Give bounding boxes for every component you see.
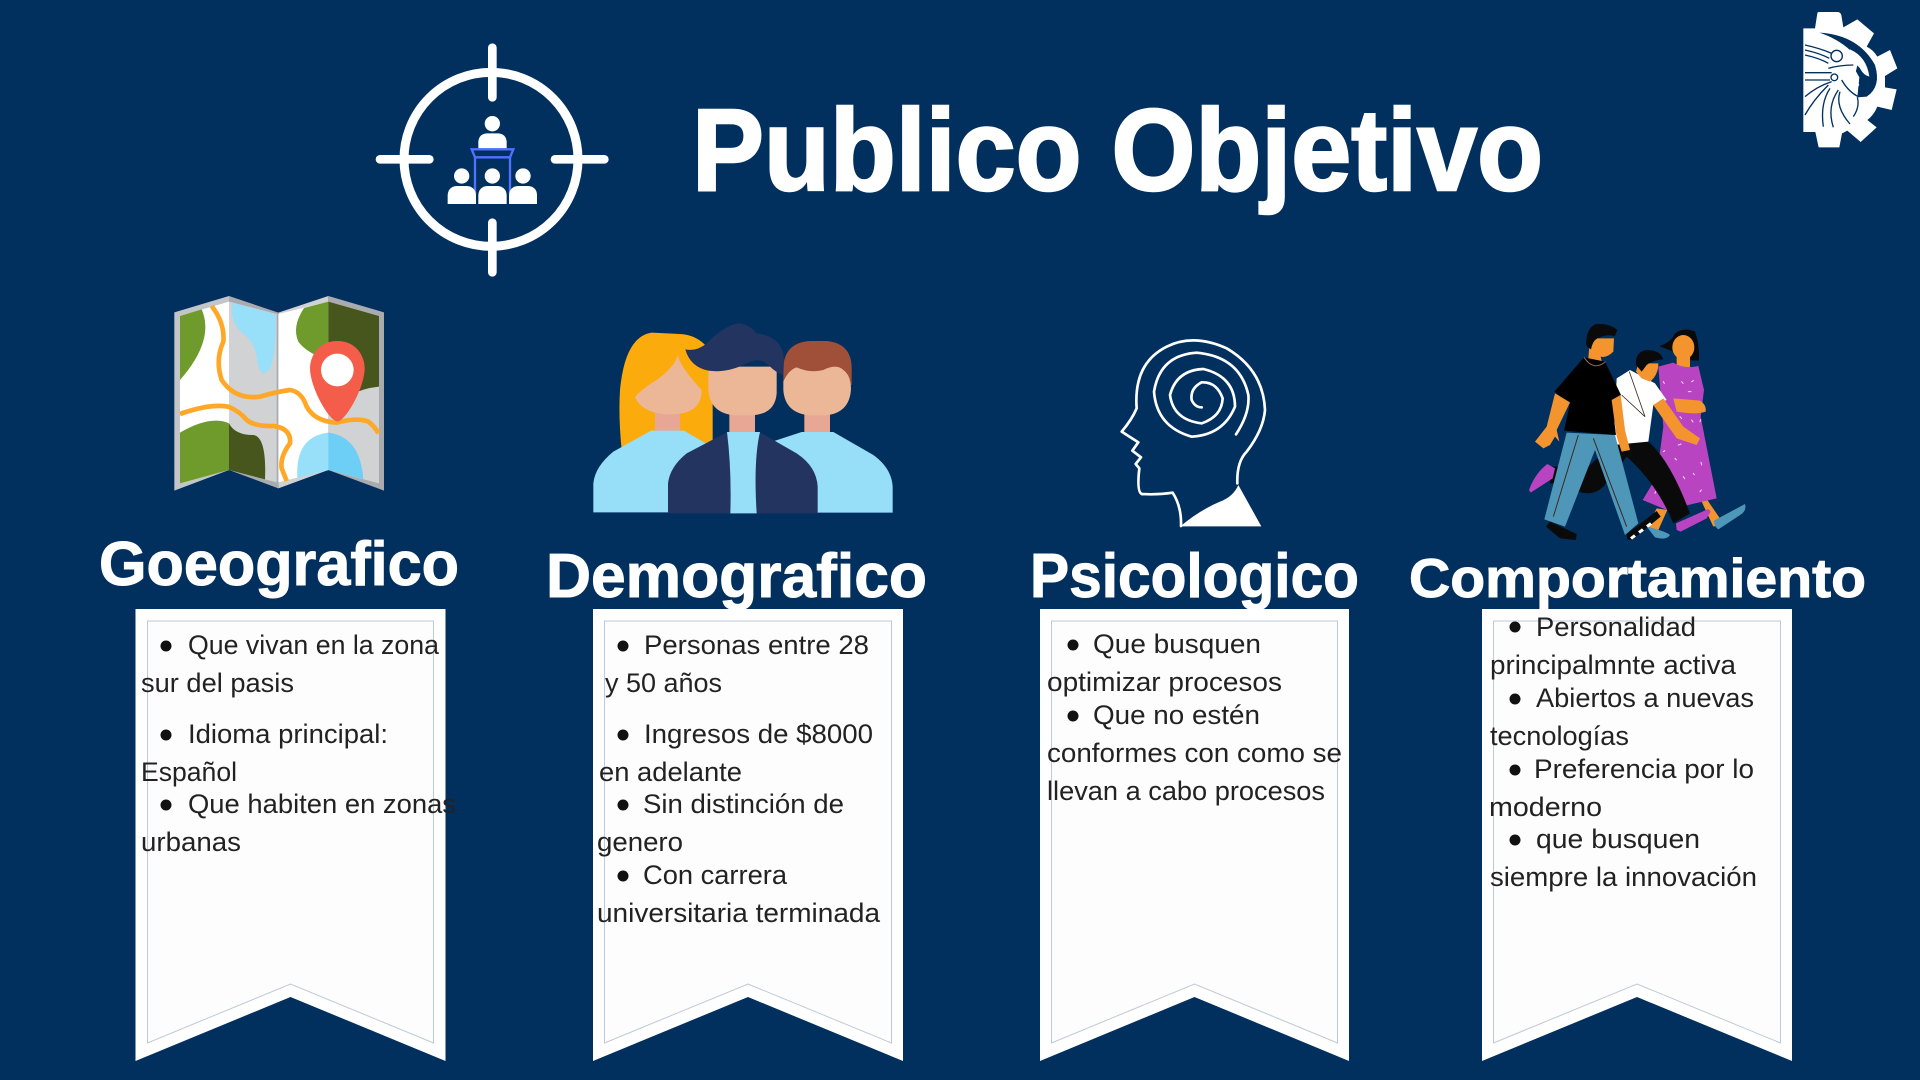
panel: comportamiento: principalmnte activa: [1490, 650, 1737, 680]
panel: comportamiento: que busquen: [1536, 824, 1700, 854]
panel: demografico: Sin distinción de: [643, 789, 844, 819]
panel: comportamiento: Abiertos a nuevas: [1536, 683, 1754, 713]
panel: demografico: Ingresos de $8000: [644, 719, 873, 749]
panel: demografico: y 50 años: [605, 668, 722, 698]
panel: demografico: universitaria terminada: [597, 898, 881, 928]
panel: comportamiento: Personalidad: [1536, 612, 1696, 642]
panel: psicologico: conformes con como se: [1047, 738, 1342, 768]
panel: psicologico: Que no estén: [1093, 700, 1260, 730]
title: Publico Objetivo: [692, 85, 1543, 215]
panel: geografico: [136, 609, 456, 1061]
panel: demografico: genero: [597, 827, 683, 857]
heading: Geografico: Goeografico: [99, 530, 459, 599]
panel: geografico: sur del pasis: [141, 668, 294, 698]
panel: comportamiento: Preferencia por lo: [1534, 754, 1754, 784]
panel: psicologico: llevan a cabo procesos: [1047, 776, 1325, 806]
panel: demografico: Personas entre 28: [644, 630, 869, 660]
panel: comportamiento: [1482, 609, 1792, 1061]
panel: geografico: Que habiten en zonas: [188, 789, 456, 819]
panel: geografico: Español: [141, 757, 237, 787]
panel: psicologico: [1040, 609, 1349, 1061]
panel: demografico: en adelante: [599, 757, 742, 787]
icon: logo gear with eagle: [1803, 12, 1897, 147]
icon: target with audience: [380, 48, 604, 272]
panel: comportamiento: siempre la innovación: [1490, 862, 1757, 892]
heading: Comportamiento: Comportamiento: [1409, 547, 1866, 609]
panel: psicologico: optimizar procesos: [1047, 667, 1282, 697]
panel: geografico: urbanas: [141, 827, 241, 857]
icon: group of people: [593, 323, 893, 513]
panel: demografico: Con carrera: [643, 860, 788, 890]
panel: psicologico: Que busquen: [1093, 629, 1261, 659]
heading: Demografico: Demografico: [546, 542, 927, 611]
panel: comportamiento: tecnologías: [1490, 721, 1629, 751]
heading: Psicologico: Psicologico: [1030, 542, 1359, 611]
icon: head with spiral: [1122, 340, 1265, 526]
panel: demografico: [593, 609, 903, 1061]
icon: folded map with pin: [174, 296, 384, 491]
panel: comportamiento: moderno: [1489, 792, 1602, 822]
panel: geografico: Idioma principal:: [188, 719, 388, 749]
icon: people walking: [1529, 324, 1745, 540]
panel: geografico: Que vivan en la zona: [188, 630, 440, 660]
